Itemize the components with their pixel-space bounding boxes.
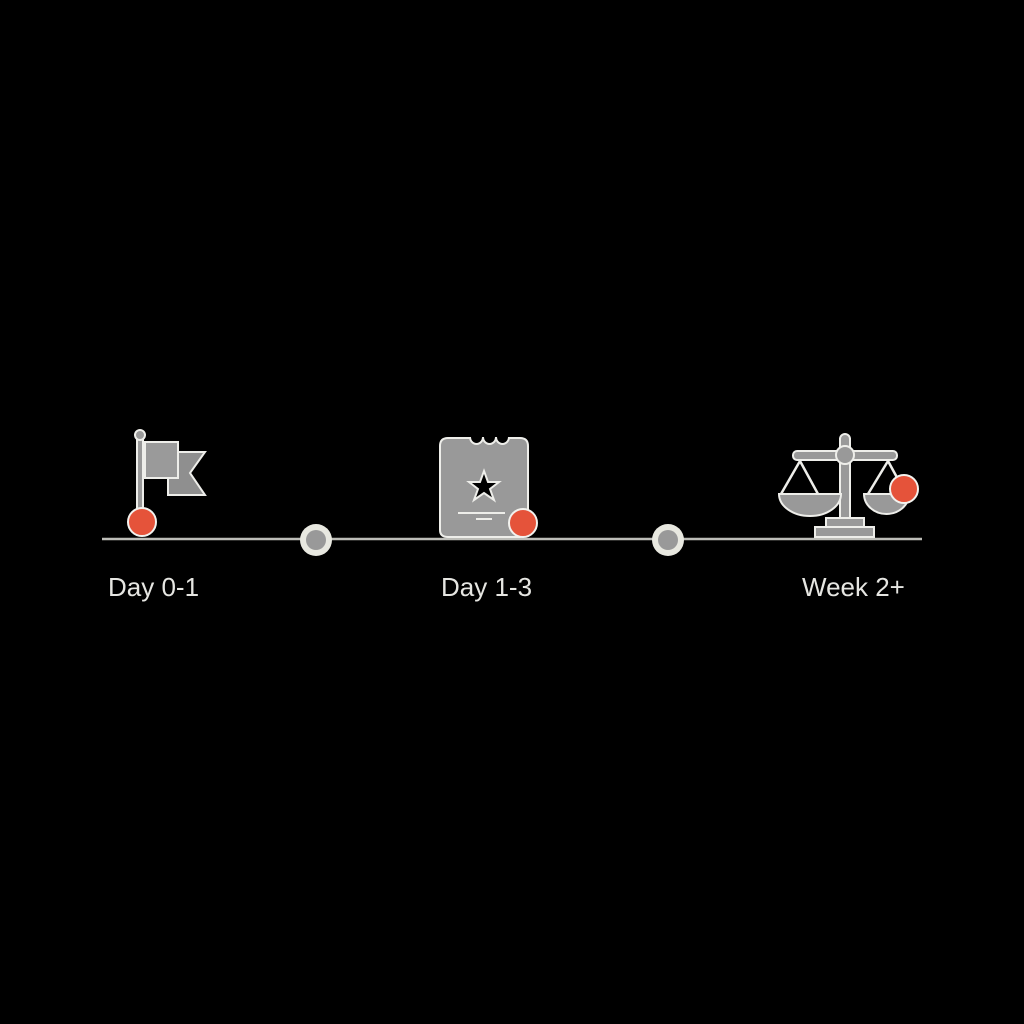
icon: notepad with star <box>440 437 537 537</box>
label: Day 1-3: Day 1-3 <box>441 572 532 602</box>
label: Day 0-1: Day 0-1 <box>108 572 199 602</box>
node 2 <box>652 524 684 556</box>
node 1 <box>300 524 332 556</box>
icon: flag <box>128 430 205 536</box>
icon: balance scale <box>779 434 918 537</box>
timeline axis <box>102 538 922 540</box>
label: Week 2+: Week 2+ <box>802 572 905 602</box>
